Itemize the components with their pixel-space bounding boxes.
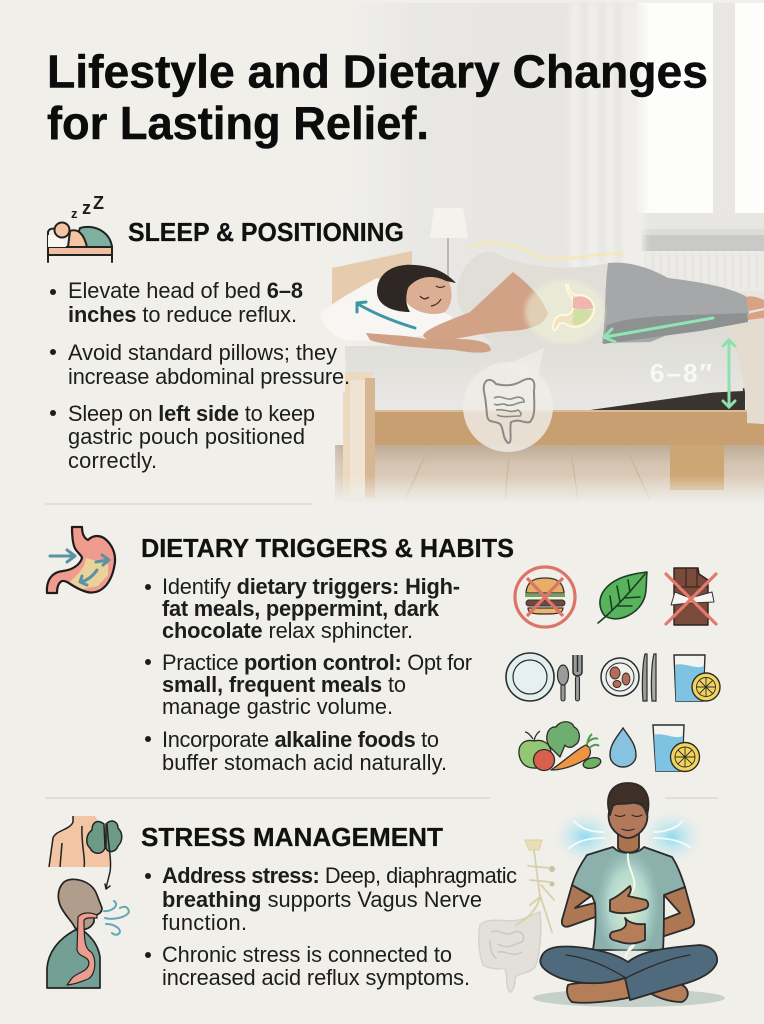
woman's pants xyxy=(602,263,749,343)
lamp xyxy=(430,208,468,278)
headboard xyxy=(332,251,412,320)
breath glow xyxy=(555,811,702,863)
dietary bullet list: buffer stomach acid naturally. xyxy=(162,750,447,775)
woman's lower arm xyxy=(366,333,491,353)
icon: sleeping person in bed: z xyxy=(71,206,78,221)
legs xyxy=(540,945,717,1000)
icon: second water glass with lemon xyxy=(653,725,700,772)
woman's head and hair xyxy=(377,265,456,314)
sleep bullet list: gastric pouch positioned xyxy=(68,424,305,449)
stress bullet list: Address stress: Deep, diaphragmatic xyxy=(162,863,517,888)
sleep bullet list: Avoid standard pillows; they xyxy=(68,340,337,365)
floor xyxy=(335,445,764,502)
dietary bullet list xyxy=(145,574,472,775)
pillow arrow xyxy=(357,302,415,328)
mattress xyxy=(345,326,743,409)
feet xyxy=(746,296,764,320)
icon: water drop xyxy=(610,728,636,767)
height arrow xyxy=(723,340,735,407)
icon: crossed-out burger xyxy=(515,567,575,627)
stress bullet list: Chronic stress is connected to xyxy=(162,942,452,967)
blanket xyxy=(727,318,764,424)
heading: stress: STRESS MANAGEMENT xyxy=(141,822,443,852)
icon: breathing profile xyxy=(47,879,129,988)
arms xyxy=(562,885,612,927)
sleep bullet list: correctly. xyxy=(68,448,157,473)
pillow xyxy=(320,278,453,341)
hands xyxy=(610,886,648,913)
shirt xyxy=(572,847,685,950)
sleep bullet list xyxy=(50,278,350,473)
dietary bullet list: Practice portion control: Opt for xyxy=(162,650,472,675)
icon: sleeping person in bed: z xyxy=(82,198,91,218)
icon: torso with vagus nerve xyxy=(49,816,122,888)
bed frame xyxy=(373,410,764,445)
window xyxy=(637,3,764,291)
icon: sleeping person in bed: Z xyxy=(93,193,104,213)
icon: plate with spoon and fork xyxy=(506,653,582,701)
sleep bullet list: Elevate head of bed 6–8 xyxy=(68,278,303,303)
stomach glow xyxy=(525,280,605,344)
feet xyxy=(567,978,632,1003)
sleep bullet list: Sleep on left side to keep xyxy=(68,401,315,426)
icon: vegetables xyxy=(519,722,602,770)
intestine callout xyxy=(463,348,553,452)
title: for Lasting Relief. xyxy=(47,97,429,149)
bed leg xyxy=(670,445,724,490)
icon: water glass with lemon xyxy=(674,655,720,701)
body arrow xyxy=(604,318,713,342)
heading: dietary: DIETARY TRIGGERS & HABITS xyxy=(141,533,514,563)
title xyxy=(47,46,708,149)
icon: small portion plate with knives xyxy=(601,654,656,701)
sleep bullet list: increase abdominal pressure. xyxy=(68,364,350,389)
curtain xyxy=(570,3,645,273)
dietary bullet list: manage gastric volume. xyxy=(162,694,393,719)
stress bullet list: function. xyxy=(162,910,247,935)
icon: sleeping person in bed xyxy=(48,193,112,262)
dietary bullet list: Incorporate alkaline foods to xyxy=(162,727,439,752)
shadow xyxy=(533,989,725,1007)
nightstand xyxy=(343,372,375,500)
icon: stomach xyxy=(47,527,115,593)
stress bullet list: increased acid reflux symptoms. xyxy=(162,965,470,990)
photo fade into page xyxy=(305,180,322,345)
dietary bullet list: fat meals, peppermint, dark xyxy=(162,596,440,621)
breath lines xyxy=(568,821,691,849)
neck and head xyxy=(618,832,639,852)
bedroom photo illustration xyxy=(320,3,764,502)
woman's shirt xyxy=(457,252,608,345)
illustration: meditating person xyxy=(533,783,725,1007)
sleep bullet list: inches to reduce reflux. xyxy=(68,302,297,327)
dietary bullet list: Identify dietary triggers: High- xyxy=(162,574,460,599)
glowing reflux wave xyxy=(468,242,625,259)
woman's upper arm xyxy=(423,272,548,341)
height label: 6–8″ xyxy=(650,358,712,388)
icon: crossed-out chocolate xyxy=(666,568,716,625)
dietary bullet list: small, frequent meals to xyxy=(162,672,406,697)
stress bullet list xyxy=(145,863,517,990)
stress bullet list: breathing supports Vagus Nerve xyxy=(162,887,482,912)
title: Lifestyle and Dietary Changes xyxy=(47,46,708,98)
illustration: nerve and intestine xyxy=(479,840,555,992)
icon: mint leaf xyxy=(598,572,647,623)
dietary bullet list: chocolate relax sphincter. xyxy=(162,618,413,643)
heading: sleep: SLEEP & POSITIONING xyxy=(128,217,404,247)
